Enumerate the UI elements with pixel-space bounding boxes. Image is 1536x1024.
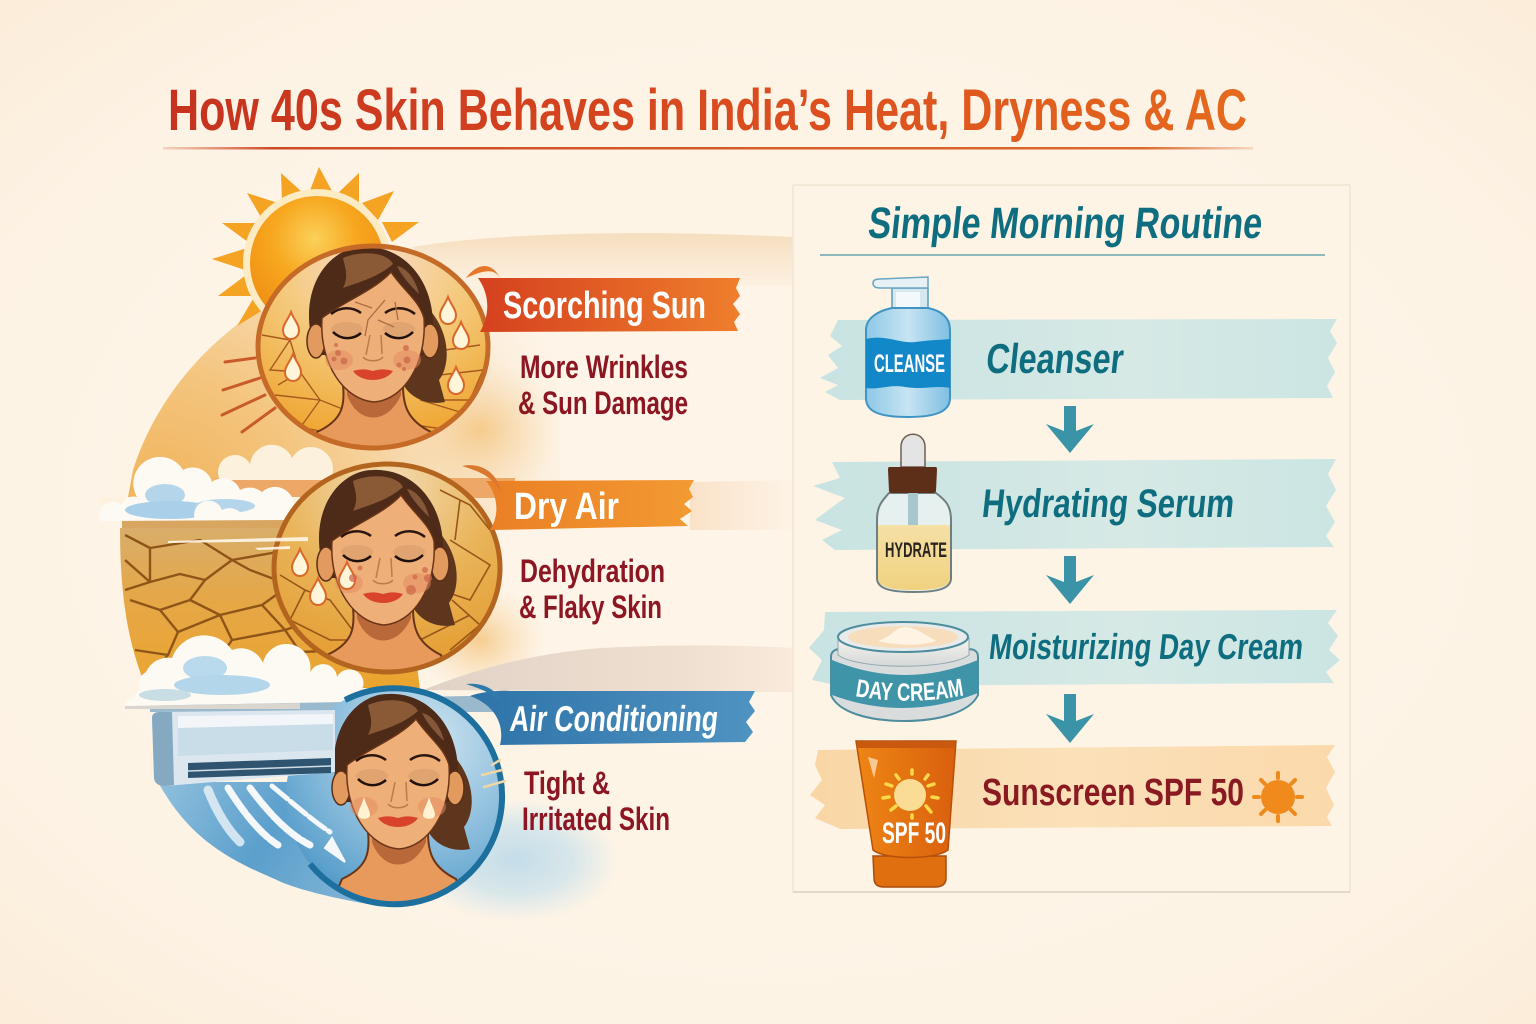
text: AC effects: Tight & bbox=[524, 765, 610, 801]
icon: air conditioner bbox=[152, 710, 345, 862]
icon: sun bbox=[212, 167, 419, 337]
icon: clouds lower bbox=[125, 635, 363, 709]
text: dry air effects: & Flaky Skin bbox=[519, 589, 662, 625]
label: Dry Air bbox=[462, 465, 694, 530]
icon: sunscreen tube: SPF 50 bbox=[882, 817, 946, 850]
icon: day cream jar bbox=[830, 621, 979, 722]
icon: chill marks bbox=[482, 760, 505, 787]
icon: cold air streaks bbox=[208, 786, 345, 862]
land stripes bbox=[215, 478, 515, 498]
arrow: step three bbox=[1046, 694, 1094, 743]
icon: dry wind streaks bbox=[168, 537, 308, 550]
band: cleanser bbox=[820, 319, 1337, 400]
text: AC effects: Irritated Skin bbox=[522, 801, 670, 837]
label: Air Conditioning: Air Conditioning bbox=[508, 698, 720, 739]
label: Scorching Sun bbox=[466, 266, 740, 332]
icon: flaky spots bbox=[349, 566, 432, 595]
icon: cleanser bottle bbox=[866, 277, 950, 417]
band: day cream bbox=[809, 610, 1340, 686]
panel: climate backdrop bbox=[100, 233, 792, 922]
band: serum bbox=[813, 459, 1336, 550]
panel: morning routine bbox=[792, 184, 1351, 893]
cold air ground bbox=[410, 798, 620, 922]
arrow: step two bbox=[1046, 556, 1094, 604]
icon: moisture drops bbox=[292, 549, 355, 605]
label: Moisturizing Day Cream: Moisturizing Day Cream bbox=[987, 626, 1305, 667]
icon: tear drops bbox=[358, 797, 435, 819]
label: Cleanser: Cleanser bbox=[984, 335, 1126, 382]
icon: sweat drops bbox=[283, 297, 469, 394]
cracked earth bbox=[120, 525, 420, 690]
heading: routine: Simple Morning Routine bbox=[866, 199, 1265, 248]
text: sun effects: & Sun Damage bbox=[518, 385, 688, 421]
panel: scorching sun portrait bbox=[257, 245, 489, 465]
label: Air Conditioning bbox=[466, 684, 755, 745]
label: Dry Air: Dry Air bbox=[514, 486, 619, 528]
text: AC effects bbox=[522, 765, 670, 837]
icon: small sun bbox=[1254, 773, 1302, 821]
icon: day cream jar: DAY CREAM bbox=[856, 678, 964, 701]
icon: cleanser bottle: CLEANSE bbox=[874, 350, 945, 378]
text: dry air effects: Dehydration bbox=[520, 553, 665, 589]
label: Sunscreen SPF 50: Sunscreen SPF 50 bbox=[982, 772, 1244, 814]
text: dry air effects bbox=[519, 553, 665, 625]
icon: serum dropper bbox=[877, 434, 951, 592]
band: sunscreen bbox=[810, 745, 1335, 829]
cold band bbox=[150, 695, 520, 712]
icon: sunscreen tube bbox=[856, 741, 956, 887]
label: Hydrating Serum: Hydrating Serum bbox=[980, 482, 1237, 526]
panel: air conditioning portrait bbox=[286, 688, 502, 912]
icon: serum dropper: HYDRATE bbox=[885, 539, 947, 562]
icon: sun rays on skin bbox=[222, 358, 275, 432]
label: Scorching Sun: Scorching Sun bbox=[503, 285, 706, 327]
icon: sun spots and wrinkles bbox=[332, 300, 410, 371]
arrow: step one bbox=[1046, 406, 1094, 453]
panel: dry air portrait bbox=[273, 463, 501, 688]
text: sun effects: More Wrinkles bbox=[520, 349, 688, 385]
tan swoosh bbox=[423, 645, 792, 692]
icon: clouds upper bbox=[99, 445, 333, 521]
text: sun effects bbox=[518, 349, 688, 421]
